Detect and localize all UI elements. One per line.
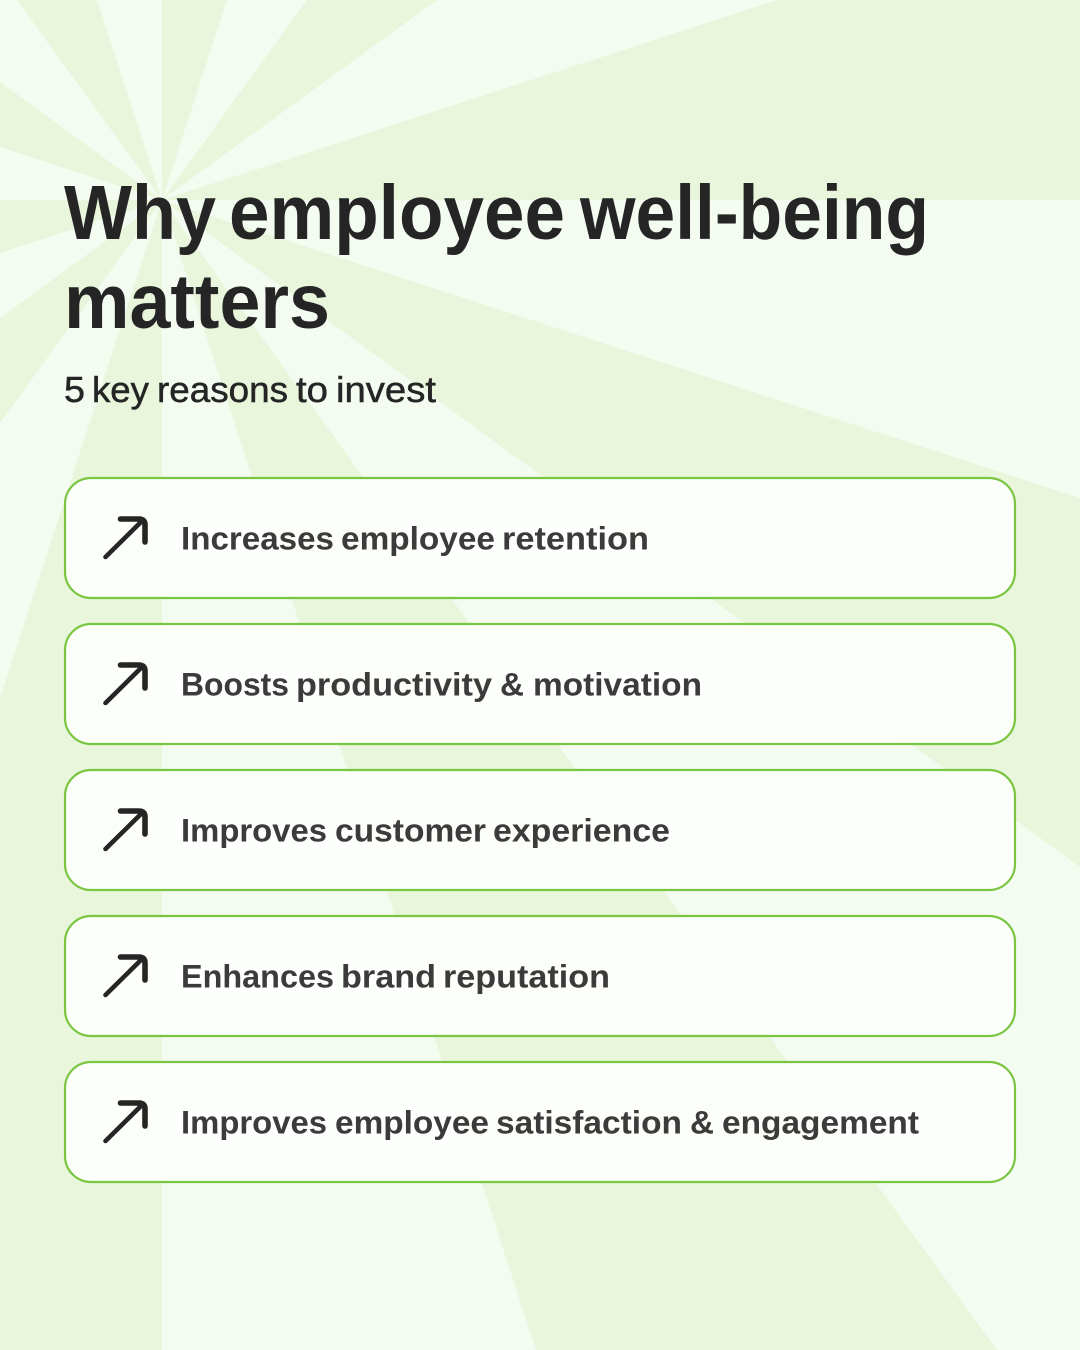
subtitle: to (296, 369, 328, 410)
card label: satisfaction (496, 1104, 682, 1140)
card label: & (690, 1104, 714, 1140)
card label: productivity (296, 666, 492, 702)
card label (181, 520, 649, 556)
card label: Increases (181, 520, 334, 556)
subtitle: 5 (64, 369, 85, 410)
card label: brand (341, 958, 436, 994)
card label (181, 666, 702, 702)
card label: & (500, 666, 524, 702)
icon: arrow up-right (106, 957, 145, 995)
subtitle: key (92, 369, 149, 410)
card label: Enhances (181, 958, 334, 994)
icon: arrow up-right (106, 519, 145, 557)
card label: motivation (533, 666, 702, 702)
card label: Improves (181, 812, 327, 848)
icon: arrow up-right (106, 1103, 145, 1141)
card label: experience (493, 812, 670, 848)
card: Boosts productivity & motivation (65, 624, 1015, 744)
card label: employee (341, 520, 495, 556)
card label: retention (502, 520, 649, 556)
card label (181, 812, 670, 848)
card label: Boosts (181, 666, 289, 702)
title: Why (64, 170, 216, 256)
icon: arrow up-right (106, 811, 145, 849)
card label (181, 958, 610, 994)
subtitle (64, 369, 436, 410)
card label: customer (335, 812, 486, 848)
title (64, 170, 929, 345)
title: well-being (579, 170, 929, 256)
card label: reputation (443, 958, 610, 994)
card: Improves customer experience (65, 770, 1015, 890)
card: Enhances brand reputation (65, 916, 1015, 1036)
icon: arrow up-right (106, 665, 145, 703)
card: Increases employee retention (65, 478, 1015, 598)
card label: employee (335, 1104, 489, 1140)
subtitle: invest (336, 369, 436, 410)
card label: Improves (181, 1104, 327, 1140)
card: Improves employee satisfaction & engagement (65, 1062, 1015, 1182)
subtitle: reasons (157, 369, 288, 410)
card label: engagement (722, 1104, 919, 1140)
title: matters (64, 259, 330, 345)
title: employee (229, 170, 565, 256)
card label (181, 1104, 919, 1140)
